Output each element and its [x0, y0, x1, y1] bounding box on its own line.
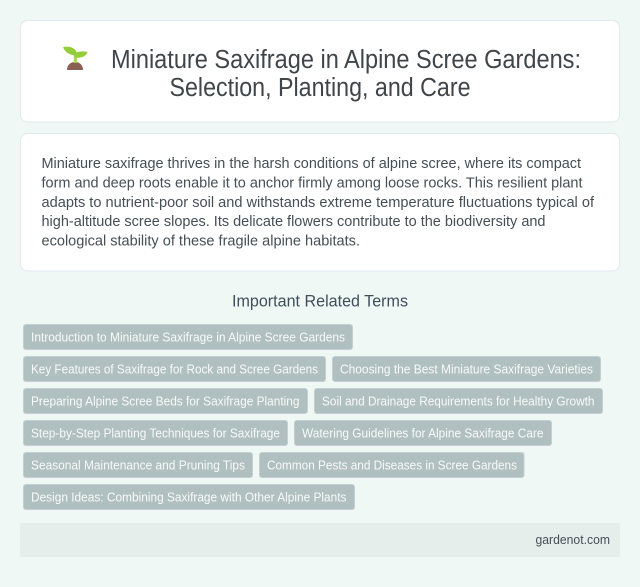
panel: related term tags — [24, 324, 602, 510]
footer — [20, 523, 620, 557]
title: Selection, Planting, and Care — [170, 74, 470, 102]
tag: preparing beds — [24, 388, 308, 414]
tag: watering guidelines: Watering Guidelines for Alpine Saxifrage Care — [302, 426, 544, 440]
tag: key features — [24, 356, 326, 382]
tag: introduction — [24, 324, 352, 350]
text block: description: ecological stability of these fragile alpine habitats. — [42, 232, 360, 250]
tag: watering guidelines — [294, 420, 552, 446]
tag: soil and drainage — [314, 388, 602, 414]
text block: description: form and deep roots enable it to anchor firmly among loose rocks. This resilient plant — [42, 174, 583, 192]
heading: related terms: Important Related Terms — [232, 292, 408, 310]
tag: preparing beds: Preparing Alpine Scree Beds for Saxifrage Planting — [31, 394, 300, 408]
tag: design ideas — [24, 484, 354, 510]
tag: seasonal maintenance: Seasonal Maintenance and Pruning Tips — [31, 458, 245, 472]
tag: introduction: Introduction to Miniature Saxifrage in Alpine Scree Gardens — [31, 330, 345, 344]
panel: description card — [20, 134, 620, 271]
footer: gardenot.com — [536, 532, 610, 547]
tag: planting techniques: Step-by-Step Planting Techniques for Saxifrage — [31, 426, 280, 440]
tag: pests and diseases: Common Pests and Diseases in Scree Gardens — [267, 458, 517, 472]
tag: seasonal maintenance — [24, 452, 252, 478]
text block: description: high-altitude scree slopes. Its delicate flowers contribute to the biodiversity and — [42, 213, 546, 230]
panel: header card — [20, 20, 620, 122]
title: Miniature Saxifrage in Alpine Scree Gardens: — [111, 46, 581, 74]
tag: design ideas: Design Ideas: Combining Saxifrage with Other Alpine Plants — [31, 490, 347, 504]
tag: planting techniques — [24, 420, 288, 446]
tag: choosing varieties — [332, 356, 600, 382]
title — [111, 46, 581, 102]
tag: pests and diseases — [260, 452, 524, 478]
icon: seedling — [63, 47, 88, 70]
tag: key features: Key Features of Saxifrage for Rock and Scree Gardens — [31, 362, 318, 376]
tag: choosing varieties: Choosing the Best Miniature Saxifrage Varieties — [340, 362, 593, 376]
text block: description — [42, 155, 595, 250]
text block: description: Miniature saxifrage thrives in the harsh conditions of alpine scree, where its compact — [42, 155, 582, 172]
text block: description: adapts to nutrient-poor soil and withstands extreme temperature fluctuations typical of — [42, 194, 595, 211]
tag: soil and drainage: Soil and Drainage Requirements for Healthy Growth — [322, 394, 594, 408]
